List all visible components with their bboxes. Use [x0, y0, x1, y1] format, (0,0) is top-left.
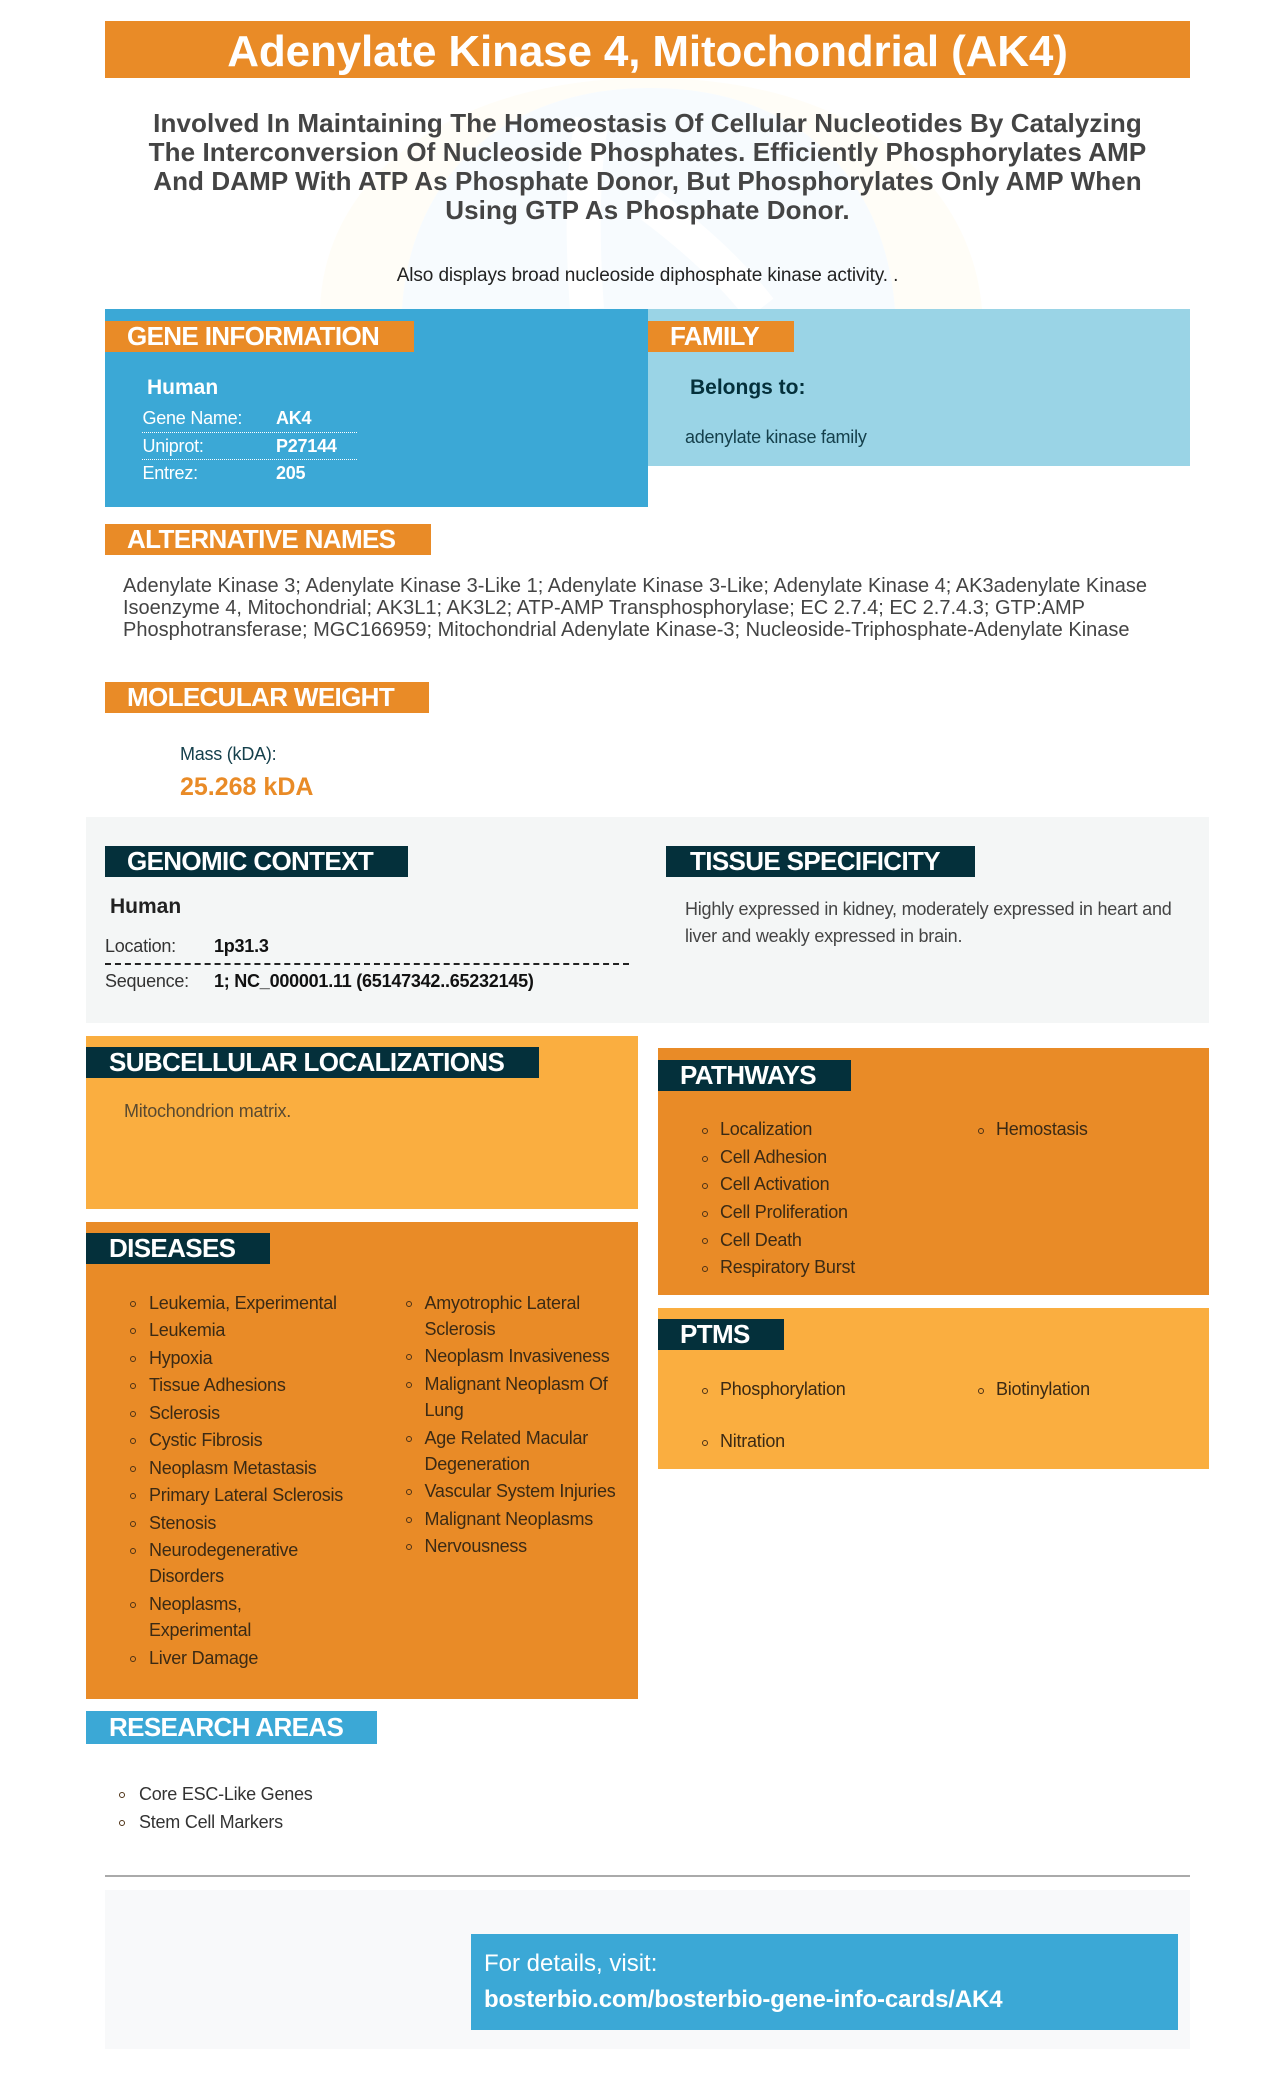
- panel: diseases: [86, 1222, 638, 1699]
- list: ptms: [702, 1379, 1090, 1451]
- list: pathways: [702, 1119, 1088, 1277]
- mass value: 25.268 kDA: [180, 773, 313, 801]
- location row: [105, 936, 269, 956]
- list: diseases column 1: Experimental: [149, 1620, 251, 1640]
- list: diseases column 2: Nervousness: [424, 1536, 527, 1556]
- gene name row: [142, 408, 312, 428]
- sequence row: 1; NC_000001.11 (65147342..65232145): [214, 971, 534, 991]
- heading: diseases: DISEASES: [109, 1233, 235, 1263]
- heading: ptms: [658, 1319, 784, 1350]
- heading: diseases: [86, 1233, 270, 1264]
- tissue specificity text: liver and weakly expressed in brain.: [685, 926, 962, 946]
- list: diseases column 2: [406, 1293, 616, 1556]
- list: pathways: Cell Death: [720, 1230, 802, 1250]
- list: ptms: Nitration: [720, 1431, 785, 1451]
- summary text: And DAMP With ATP As Phosphate Donor, But Phosphorylates Only AMP When: [153, 166, 1142, 196]
- list: diseases column 1: Hypoxia: [149, 1348, 212, 1368]
- list: diseases column 1: Neoplasms,: [149, 1594, 242, 1614]
- list: ptms: Phosphorylation: [720, 1379, 846, 1399]
- location row: 1p31.3: [214, 936, 269, 956]
- callout url: bosterbio.com/bosterbio-gene-info-cards/AK4: [484, 1986, 1002, 2013]
- title: Adenylate Kinase 4, Mitochondrial (AK4): [227, 27, 1068, 76]
- heading: ptms: PTMS: [680, 1319, 750, 1349]
- secondary summary: Also displays broad nucleoside diphosphate kinase activity. .: [397, 265, 898, 286]
- entrez row: [142, 463, 305, 483]
- list: research areas: Core ESC-Like Genes: [139, 1784, 313, 1804]
- summary text: Using GTP As Phosphate Donor.: [445, 195, 850, 225]
- list: diseases column 1: Cystic Fibrosis: [149, 1430, 262, 1450]
- heading: family: FAMILY: [670, 321, 759, 351]
- panel: gene information: [105, 309, 648, 507]
- list: diseases column 1: Liver Damage: [149, 1648, 258, 1668]
- list: diseases column 1: Disorders: [149, 1566, 224, 1586]
- heading: genomic context: GENOMIC CONTEXT: [127, 846, 373, 876]
- callout: details link: [471, 1934, 1178, 2030]
- heading: research areas: RESEARCH AREAS: [109, 1712, 343, 1742]
- list: diseases column 1: Tissue Adhesions: [149, 1375, 286, 1395]
- heading: subcellular localizations: SUBCELLULAR LOCALIZATIONS: [109, 1047, 504, 1077]
- summary text: Involved In Maintaining The Homeostasis Of Cellular Nucleotides By Catalyzing: [153, 108, 1142, 138]
- species: Human: [110, 895, 181, 918]
- heading: pathways: PATHWAYS: [680, 1060, 816, 1090]
- list: diseases column 1: Leukemia: [149, 1320, 225, 1340]
- list: diseases column 2: Neoplasm Invasiveness: [424, 1346, 610, 1366]
- list: diseases column 1: Primary Lateral Sclerosis: [149, 1485, 343, 1505]
- list: pathways: Hemostasis: [996, 1119, 1088, 1139]
- list: diseases column 1: Neoplasm Metastasis: [149, 1458, 317, 1478]
- panel: family: [648, 309, 1190, 466]
- list: diseases column 2: Malignant Neoplasm Of: [424, 1374, 608, 1394]
- panel: ptms: [658, 1308, 1209, 1469]
- uniprot row: P27144: [276, 436, 337, 456]
- uniprot row: Uniprot:: [142, 436, 204, 456]
- list: diseases column 2: Malignant Neoplasms: [424, 1509, 593, 1529]
- location row: Location:: [105, 936, 176, 956]
- list: diseases column 2: Age Related Macular: [424, 1428, 588, 1448]
- list: research areas: [119, 1784, 313, 1832]
- panel: subcellular localizations: [86, 1036, 638, 1209]
- list: research areas: Stem Cell Markers: [139, 1812, 283, 1832]
- alternative names text: Isoenzyme 4, Mitochondrial; AK3L1; AK3L2; ATP-AMP Transphosphorylase; EC 2.7.4; EC 2.7.4.3; GTP:AMP: [123, 597, 1085, 619]
- panel: footer: [105, 1890, 1190, 2049]
- list: diseases column 2: Lung: [424, 1400, 464, 1420]
- list: diseases column 2: Degeneration: [424, 1454, 530, 1474]
- list: diseases column 2: Sclerosis: [424, 1319, 495, 1339]
- belongs to: Belongs to:: [690, 376, 806, 399]
- list: pathways: Localization: [720, 1119, 812, 1139]
- species: Human: [147, 376, 218, 399]
- list: diseases column 1: Leukemia, Experimental: [149, 1293, 337, 1313]
- heading: pathways: [658, 1060, 851, 1091]
- heading: tissue specificity: TISSUE SPECIFICITY: [690, 846, 940, 876]
- summary text: The Interconversion Of Nucleoside Phosphates. Efficiently Phosphorylates AMP: [149, 137, 1146, 167]
- list: diseases column 1: [130, 1293, 343, 1668]
- callout label: For details, visit:: [484, 1950, 657, 1977]
- gene name row: Gene Name:: [142, 408, 242, 428]
- tissue specificity text: Highly expressed in kidney, moderately expressed in heart and: [685, 899, 1172, 919]
- family name: adenylate kinase family: [685, 427, 867, 447]
- panel: genomic context and tissue specificity: [86, 817, 1209, 1023]
- list: diseases column 1: Sclerosis: [149, 1403, 220, 1423]
- localization text: Mitochondrion matrix.: [124, 1101, 291, 1121]
- entrez row: 205: [276, 463, 305, 483]
- title: [105, 21, 1190, 78]
- list: ptms: Biotinylation: [996, 1379, 1090, 1399]
- list: diseases column 1: Stenosis: [149, 1513, 216, 1533]
- gene name row: AK4: [276, 408, 311, 428]
- list: pathways: Respiratory Burst: [720, 1257, 855, 1277]
- panel: pathways: [658, 1048, 1209, 1295]
- heading: alternative names: ALTERNATIVE NAMES: [127, 524, 395, 554]
- alternative names text: [123, 575, 1147, 641]
- list: pathways: Cell Proliferation: [720, 1202, 848, 1222]
- tissue specificity text: [685, 899, 1172, 946]
- list: diseases column 2: Amyotrophic Lateral: [424, 1293, 580, 1313]
- list: diseases column 1: Neurodegenerative: [149, 1540, 298, 1560]
- sequence row: Sequence:: [105, 971, 189, 991]
- uniprot row: [142, 436, 337, 456]
- mass label: Mass (kDA):: [180, 744, 276, 764]
- heading: gene information: GENE INFORMATION: [127, 321, 379, 351]
- summary text: [148, 108, 1146, 225]
- heading: molecular weight: MOLECULAR WEIGHT: [127, 682, 394, 712]
- list: pathways: Cell Activation: [720, 1174, 829, 1194]
- heading: family: [648, 321, 794, 352]
- entrez row: Entrez:: [142, 463, 198, 483]
- alternative names text: Phosphotransferase; MGC166959; Mitochondrial Adenylate Kinase-3; Nucleoside-Triphosphate-Adenylate Kinase: [123, 619, 1130, 641]
- background watermark: [0, 0, 1288, 320]
- list: diseases column 2: Vascular System Injuries: [424, 1481, 615, 1501]
- alternative names text: Adenylate Kinase 3; Adenylate Kinase 3-Like 1; Adenylate Kinase 3-Like; Adenylate Kinase 4; AK3adenylate Kinase: [123, 575, 1147, 597]
- list: pathways: Cell Adhesion: [720, 1147, 827, 1167]
